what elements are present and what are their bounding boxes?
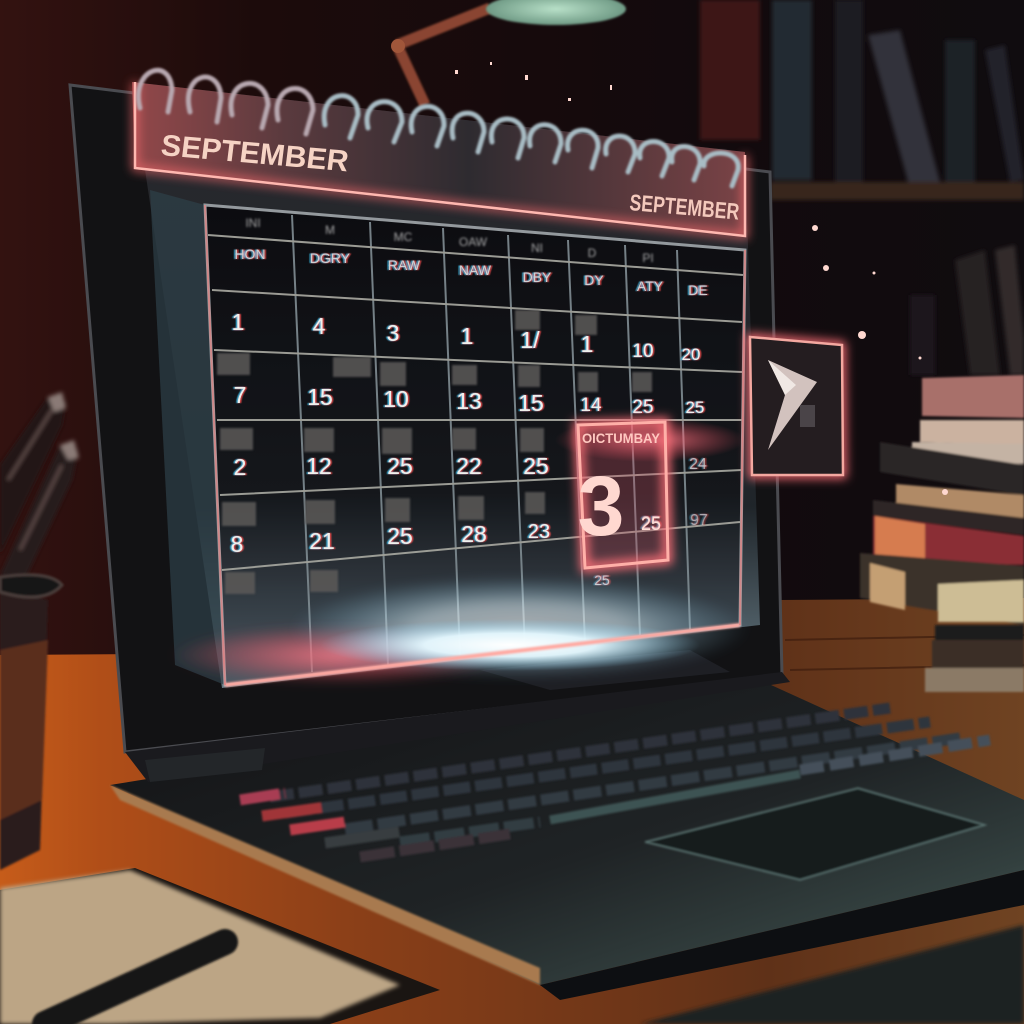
weekday labels: DE: [688, 282, 708, 298]
date numbers: 24: [689, 456, 707, 473]
date numbers: 22: [456, 453, 482, 479]
highlighted date card: 3: [578, 459, 624, 553]
weekday small labels: D: [588, 246, 597, 260]
date numbers: 1: [232, 309, 244, 335]
date numbers: 25: [387, 453, 413, 479]
heading: SEPTEMBER small: SEPTEMBER: [629, 189, 741, 225]
weekday small labels: M: [325, 223, 335, 237]
weekday small labels: OAW: [459, 235, 488, 249]
trackpad: [645, 788, 985, 880]
date numbers: 1: [461, 323, 473, 349]
date numbers: 97: [690, 512, 708, 529]
weekday labels: RAW: [388, 257, 421, 273]
calendar body: [132, 82, 760, 688]
date numbers: 23: [528, 521, 550, 543]
weekday labels: DGRY: [310, 250, 351, 266]
highlighted date card: 25: [641, 514, 661, 534]
weekday small labels: [245, 216, 654, 265]
left and right side edges: [205, 205, 745, 685]
heading: SEPTEMBER: SEPTEMBER: [159, 129, 351, 178]
icon: arrow: [768, 360, 817, 450]
desk lamp: [391, 0, 626, 105]
date numbers: 15: [307, 384, 333, 410]
header outline glow: [135, 82, 745, 236]
calendar header band: [132, 82, 745, 236]
date numbers: 8: [231, 531, 243, 557]
date numbers: 25: [641, 513, 661, 533]
date numbers: 21: [309, 528, 335, 554]
weekday labels: ATY: [637, 278, 664, 294]
date numbers: 1: [581, 331, 593, 357]
weekday labels: DY: [584, 272, 604, 288]
date numbers: 15: [518, 390, 544, 416]
date numbers: 3: [387, 320, 399, 346]
wooden desk: [0, 598, 1024, 1024]
date numbers: 10: [632, 341, 654, 362]
date numbers: 13: [456, 388, 482, 414]
date numbers: 20: [682, 345, 700, 364]
panel: holographic calendar: [132, 70, 760, 688]
highlighted date card: OICTUMBAY: [582, 430, 661, 446]
laptop base: [110, 680, 1024, 985]
spiral binding: [138, 70, 738, 186]
weekday small labels: PI: [642, 251, 654, 265]
weekday labels: HON: [234, 246, 266, 262]
icon: mesh cup: [0, 575, 62, 870]
date numbers: 1/: [520, 327, 540, 353]
weekday labels: [234, 246, 708, 298]
weekday small labels: MC: [394, 230, 413, 244]
floating light particles: [455, 62, 948, 495]
date numbers: 4: [313, 313, 326, 339]
date numbers: 7: [234, 382, 246, 408]
bottom glow: [170, 576, 750, 685]
notebook with pen: [0, 868, 440, 1024]
date numbers: 25: [686, 398, 704, 417]
weekday small labels: NI: [531, 241, 543, 255]
pink light streak: [555, 418, 745, 462]
icon: pens: [0, 392, 79, 590]
icon: pen: [45, 942, 225, 1024]
date numbers: 25: [594, 572, 610, 588]
date numbers: 2: [234, 454, 246, 480]
event thumbnails: [217, 310, 652, 594]
date numbers: 28: [461, 521, 487, 547]
weekday labels: DBY: [523, 269, 552, 285]
pen holder with pens: [0, 392, 79, 870]
date numbers: 25: [387, 523, 413, 549]
screen bezel: [70, 85, 782, 752]
arrow card: [750, 337, 843, 475]
date numbers: 25: [632, 397, 654, 418]
weekday labels: NAW: [459, 262, 492, 278]
book stack: [860, 375, 1024, 692]
weekday small labels: INI: [245, 216, 261, 230]
date numbers: 10: [383, 386, 409, 412]
bookshelf: [700, 0, 1024, 375]
date numbers: 12: [306, 453, 332, 479]
calendar grid: [205, 205, 745, 685]
date numbers: [231, 309, 708, 588]
date numbers: 14: [580, 395, 602, 416]
highlighted date card: [578, 422, 668, 568]
date numbers: 25: [523, 453, 549, 479]
keyboard: [240, 708, 990, 857]
